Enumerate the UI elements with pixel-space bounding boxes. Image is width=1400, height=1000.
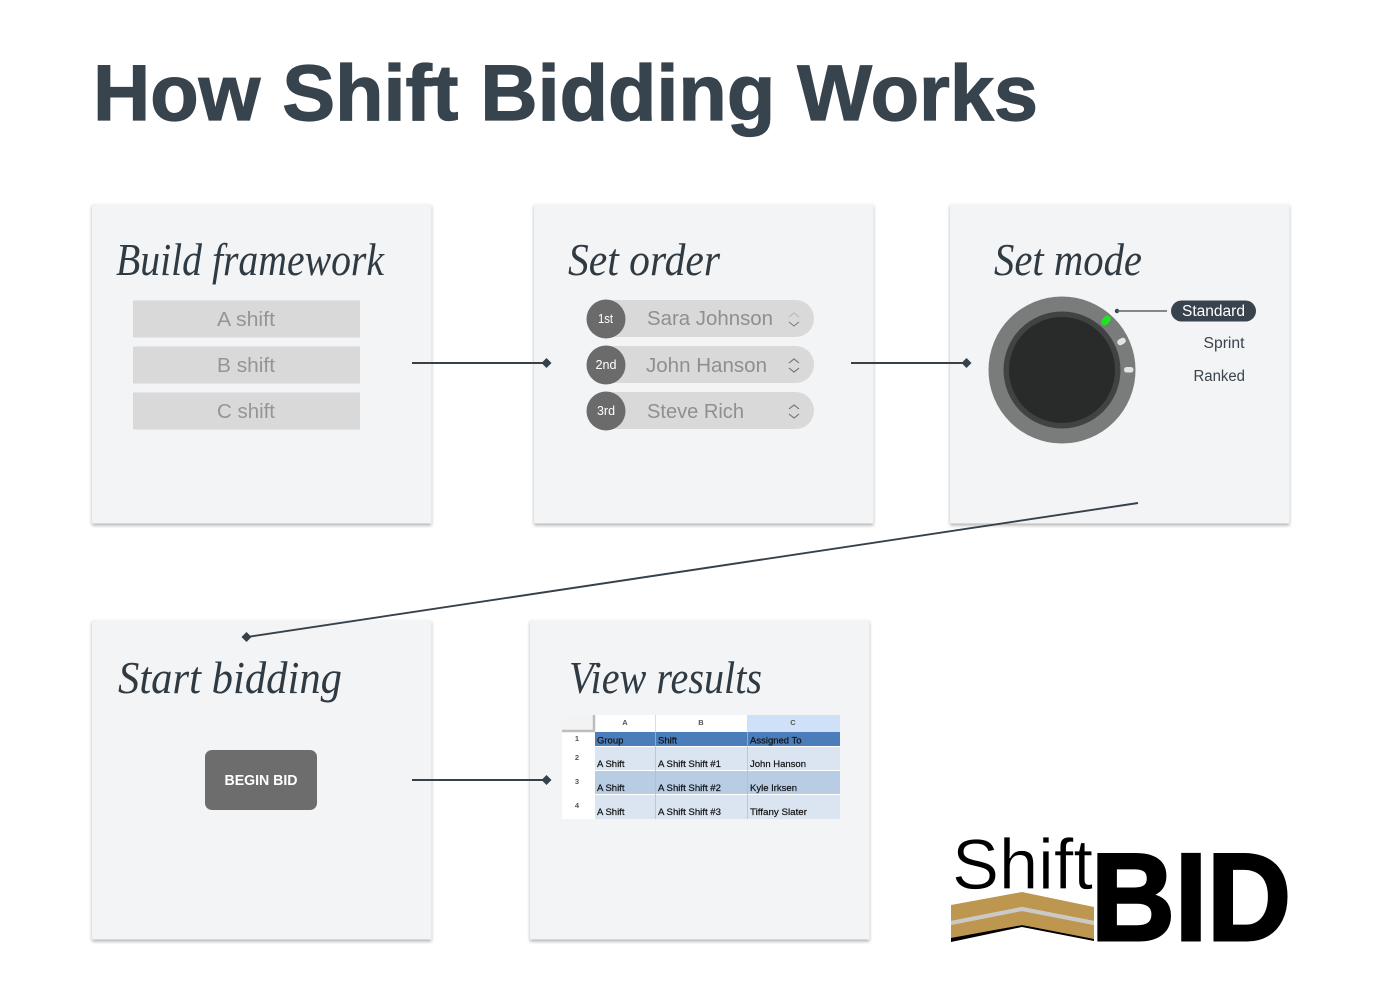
arrow: order to mode [851,358,972,368]
results spreadsheet: A Shift Shift #3 [658,807,721,818]
B shift bar: B shift [217,355,275,377]
mode connector [1115,309,1167,313]
begin bid button: BEGIN BID [224,773,298,789]
results spreadsheet: A Shift [597,807,625,818]
heading: set order: Set order [568,234,721,285]
order row 2: 2nd [596,357,616,372]
results spreadsheet: A Shift [597,783,625,794]
mode: sprint: Sprint [1204,335,1245,352]
logo chevrons [951,892,1094,942]
results spreadsheet: Assigned To [750,736,802,746]
results spreadsheet: 2 [575,753,579,762]
results spreadsheet: A Shift [597,759,625,770]
results spreadsheet: Shift [658,736,677,746]
mode: standard [1171,300,1256,322]
order row 3 [586,392,814,430]
panel: set order [534,204,874,524]
panel: view results [530,620,870,940]
panel: set mode [950,204,1290,524]
panel: build framework [92,204,432,524]
results spreadsheet: B [698,718,704,727]
arrow: mode to start bidding [242,503,1138,642]
begin bid button [205,750,317,810]
logo: ShiftBID [951,826,1291,967]
results spreadsheet: C [790,718,796,727]
A shift bar: A shift [217,309,275,331]
heading: view results: View results [569,652,762,703]
mode: ranked: Ranked [1194,368,1245,385]
results spreadsheet: 3 [575,777,579,786]
arrow: start bidding to results [412,775,552,785]
results spreadsheet: Group [597,736,623,746]
order row 2 [586,346,814,384]
heading: build framework: Build framework [116,234,385,285]
panel: start bidding [92,620,432,940]
results spreadsheet: A [622,718,628,727]
logo word: Shift: Shift [952,826,1093,905]
C shift bar [133,392,360,430]
order row 1: Sara Johnson [647,308,773,330]
results spreadsheet: Tiffany Slater [750,807,807,818]
A shift bar [133,300,360,338]
results spreadsheet: 4 [575,801,580,810]
C shift bar: C shift [217,401,275,423]
order row 2: John Hanson [646,355,767,377]
order row 1: 1st [598,311,613,326]
results spreadsheet: Kyle Irksen [750,783,797,794]
heading: set mode: Set mode [994,234,1142,285]
order row 3: Steve Rich [647,401,744,423]
mode: standard: Standard [1182,303,1245,320]
arrow: framework to order [412,358,552,368]
order row 1 [586,300,814,338]
order row 3: 3rd [597,403,615,418]
results spreadsheet: 1 [575,734,579,743]
B shift bar [133,346,360,384]
icon: mode dial [988,296,1136,444]
title: How Shift Bidding Works [93,48,1038,137]
results spreadsheet: John Hanson [750,759,806,770]
results spreadsheet: A Shift Shift #2 [658,783,721,794]
heading: start bidding: Start bidding [118,652,342,703]
results spreadsheet [562,715,840,819]
results spreadsheet: A Shift Shift #1 [658,759,721,770]
logo word: BID: BID [1091,829,1291,967]
